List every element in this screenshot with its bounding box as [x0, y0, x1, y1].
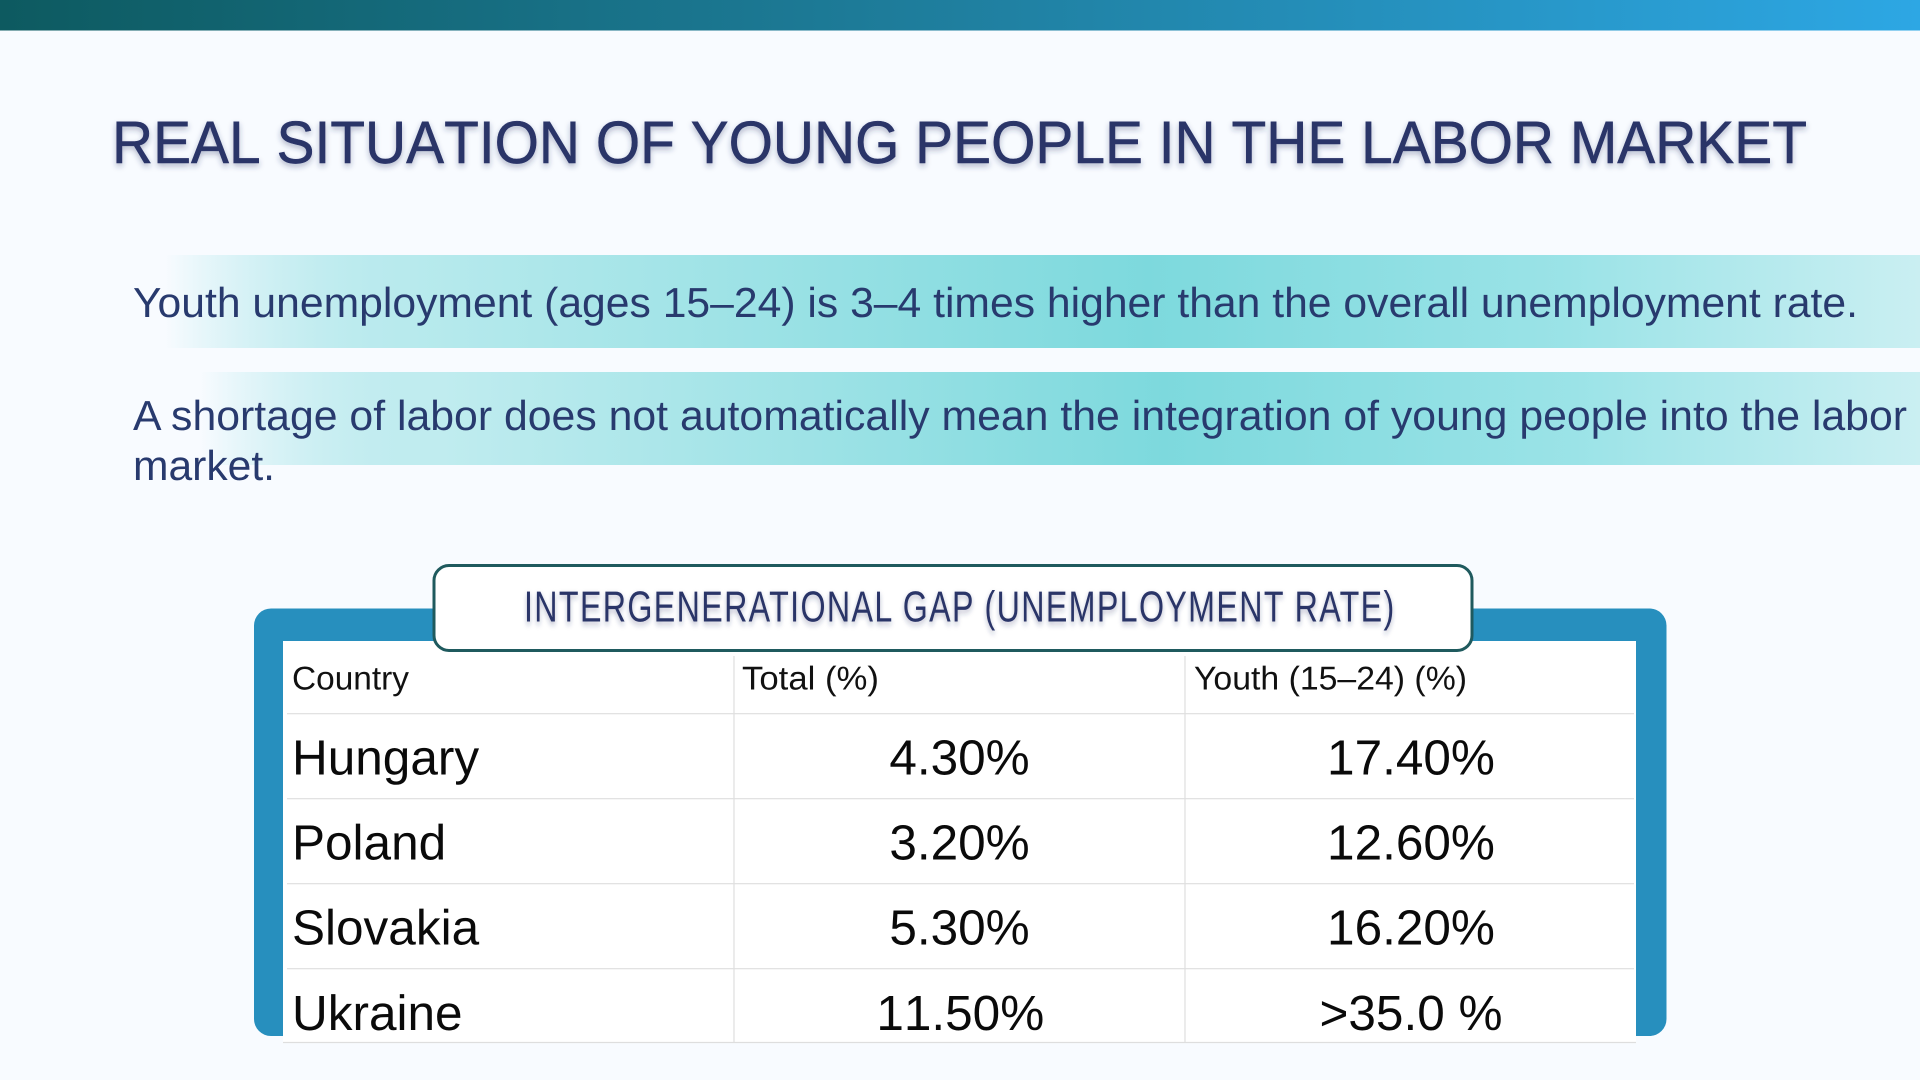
- panel frame: [254, 608, 1666, 1036]
- title: REAL SITUATION OF YOUNG PEOPLE IN THE LABOR MARKET: [112, 109, 1807, 176]
- row: Ukraine: 11.50%: [876, 986, 1044, 1041]
- row: Hungary: 4.30%: [889, 731, 1030, 786]
- table header row: Country: [292, 660, 409, 697]
- table header row: Youth (15–24) (%): [1194, 660, 1467, 697]
- row: Poland: Poland: [292, 816, 446, 871]
- row: Ukraine: >35.0 %: [1319, 986, 1503, 1041]
- callout band: youth unemployment: [133, 255, 1920, 348]
- row: Hungary: 17.40%: [1327, 731, 1495, 786]
- panel: intergenerational gap table: [254, 566, 1666, 1042]
- row: Slovakia: [292, 901, 1495, 956]
- row: Poland: 12.60%: [1327, 816, 1495, 871]
- table title tab: INTERGENERATIONAL GAP (UNEMPLOYMENT RATE): [524, 584, 1394, 632]
- row: Ukraine: [292, 986, 1503, 1041]
- row: Poland: 3.20%: [889, 816, 1030, 871]
- table: [283, 641, 1636, 1042]
- row: Slovakia: Slovakia: [292, 901, 480, 956]
- table header row: Total (%): [742, 660, 879, 697]
- callout band: labor shortage: [133, 372, 1920, 489]
- row: Slovakia: 16.20%: [1327, 901, 1495, 956]
- row: Poland: [292, 816, 1495, 871]
- callout band: youth unemployment: Youth unemployment (ages 15–24) is 3–4 times higher than the overall unemployment rate.: [133, 279, 1858, 326]
- row: Hungary: [292, 731, 1495, 786]
- callout band: labor shortage: market.: [133, 442, 275, 489]
- table header row: [292, 660, 1467, 697]
- row: Ukraine: Ukraine: [292, 986, 463, 1041]
- row: Hungary: Hungary: [292, 731, 479, 786]
- row: Slovakia: 5.30%: [889, 901, 1030, 956]
- top gradient bar: [0, 0, 1920, 30]
- table title tab: [434, 566, 1472, 650]
- callout band: labor shortage: A shortage of labor does not automatically mean the integration of young people into the labor: [133, 392, 1907, 439]
